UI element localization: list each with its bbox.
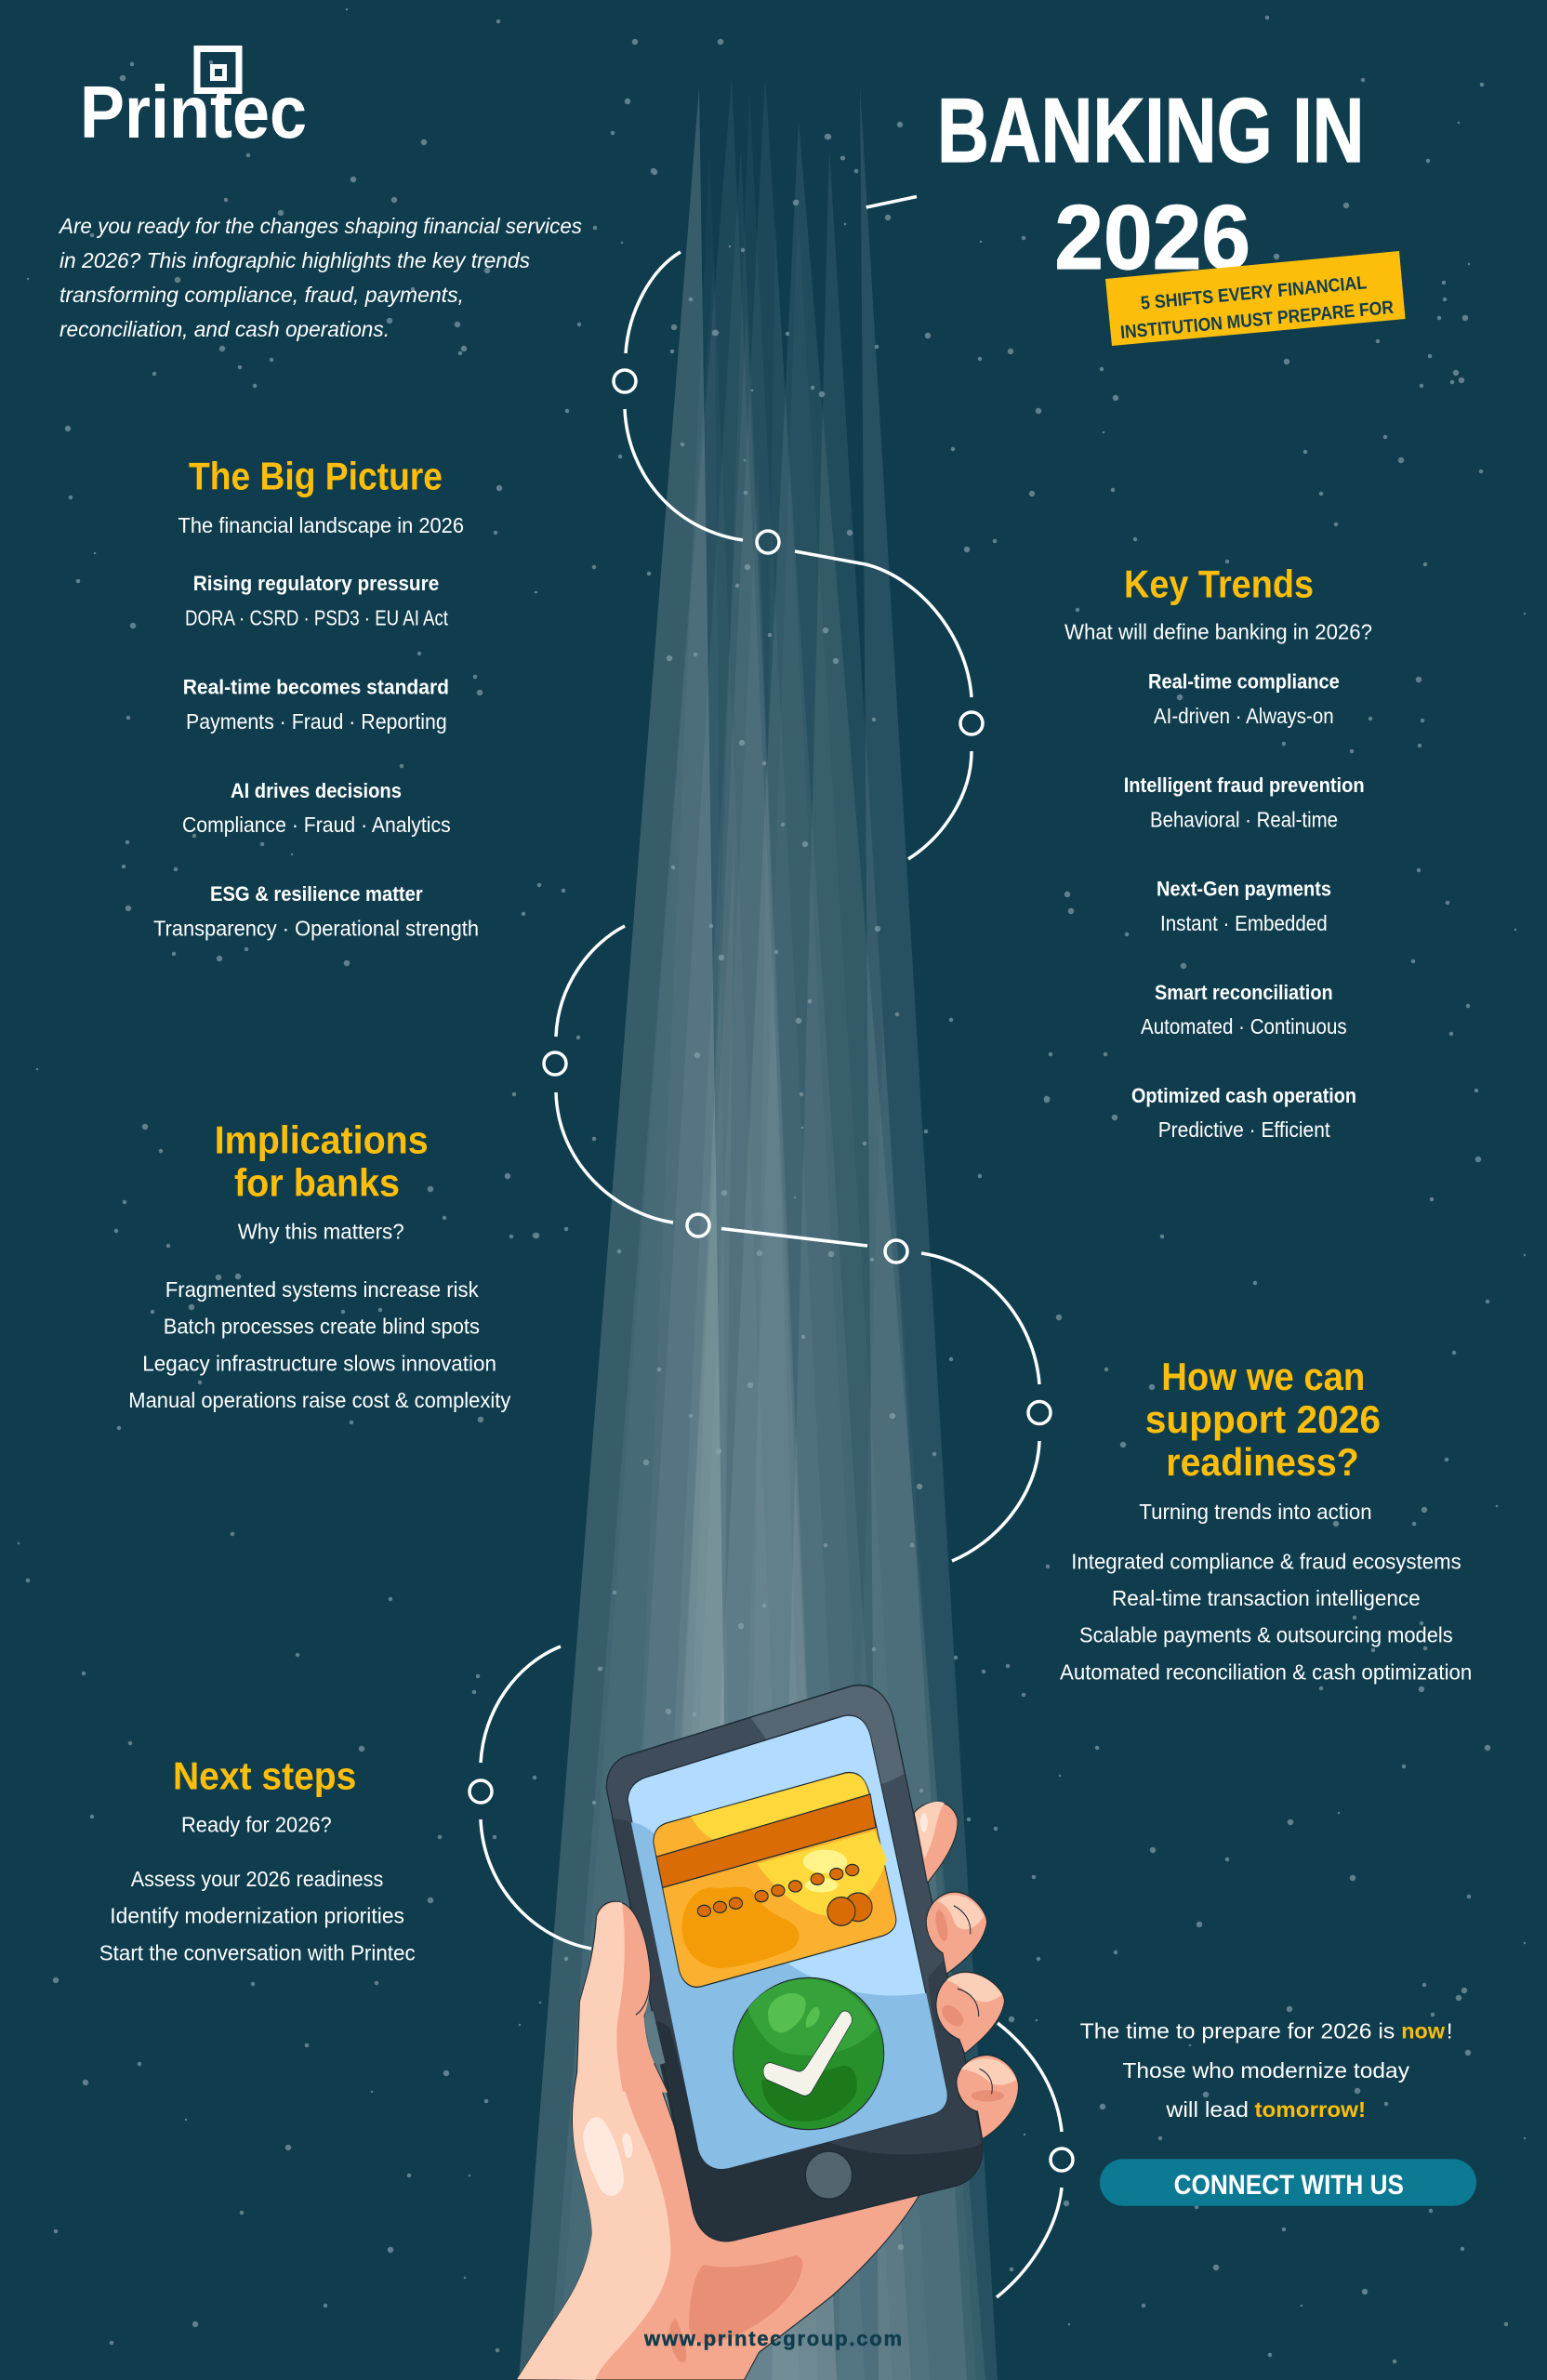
heading: implications for banks: for banks bbox=[234, 1161, 400, 1205]
credit card bbox=[654, 1772, 896, 1987]
closing message: tomorrow! bbox=[1255, 2097, 1366, 2122]
list: implications: Fragmented systems increase risk bbox=[165, 1277, 479, 1302]
closing message: Those who modernize today bbox=[1122, 2058, 1410, 2082]
title bbox=[937, 79, 1365, 288]
subheading: financial landscape: The financial landscape in 2026 bbox=[178, 513, 464, 537]
list: support offerings: Scalable payments & outsourcing models bbox=[1079, 1623, 1453, 1647]
subtitle banner bbox=[1105, 251, 1406, 346]
heading: implications for banks bbox=[215, 1118, 429, 1205]
heading: key trends: Key Trends bbox=[1124, 562, 1314, 606]
heading: how we can support 2026 readiness bbox=[1145, 1355, 1381, 1484]
illustration: hand holding phone bbox=[516, 1686, 1018, 2380]
home button bbox=[806, 2151, 852, 2199]
item: intelligent fraud prevention: Intelligent fraud prevention bbox=[1124, 774, 1365, 797]
list: next steps: Assess your 2026 readiness bbox=[131, 1867, 383, 1891]
list: implications: Manual operations raise cost & complexity bbox=[128, 1388, 511, 1412]
item: esg and resilience: Transparency · Operational strength bbox=[153, 917, 479, 941]
title: 2026 bbox=[1054, 186, 1250, 288]
closing message: will lead bbox=[1165, 2097, 1249, 2122]
item: real-time compliance: AI-driven · Always-on bbox=[1154, 704, 1334, 728]
fingers bbox=[914, 1802, 1018, 2139]
list: next steps: Start the conversation with Printec bbox=[99, 1940, 416, 1964]
list: implications bbox=[128, 1277, 511, 1412]
panel: implications for banks bbox=[128, 1118, 511, 1412]
item: esg and resilience bbox=[153, 882, 479, 941]
item: real-time compliance: Real-time compliance bbox=[1148, 670, 1340, 694]
heading: next steps: Next steps bbox=[173, 1753, 356, 1797]
item: smart reconciliation: Automated · Continuous bbox=[1141, 1014, 1347, 1038]
item: rising regulatory pressure: Rising regulatory pressure bbox=[193, 572, 439, 595]
item: real-time becomes standard: Real-time becomes standard bbox=[183, 676, 449, 699]
item: real-time becomes standard: Payments · Fraud · Reporting bbox=[186, 709, 447, 734]
intro text bbox=[58, 214, 582, 341]
item: ai drives decisions: AI drives decisions bbox=[231, 779, 402, 802]
list: support offerings: Automated reconciliation & cash optimization bbox=[1060, 1659, 1472, 1684]
item: intelligent fraud prevention bbox=[1124, 774, 1365, 832]
title: BANKING IN bbox=[937, 79, 1365, 181]
closing message bbox=[1080, 2019, 1452, 2122]
light beams bbox=[519, 74, 998, 2380]
subtitle banner: 5 SHIFTS EVERY FINANCIAL bbox=[1140, 272, 1368, 314]
thumb bbox=[616, 1903, 668, 2093]
subheading: what will define banking: What will define banking in 2026? bbox=[1064, 620, 1372, 644]
panel: next steps bbox=[99, 1753, 416, 1964]
intro text: in 2026? This infographic highlights the key trends bbox=[60, 248, 530, 272]
item: ai drives decisions bbox=[182, 779, 451, 837]
closing message: now bbox=[1401, 2019, 1445, 2043]
phone body bbox=[606, 1686, 983, 2241]
subheading: ready for 2026: Ready for 2026? bbox=[181, 1813, 332, 1837]
item: optimized cash operation bbox=[1131, 1084, 1356, 1142]
closing message: The time to prepare for 2026 is bbox=[1080, 2019, 1395, 2043]
item: real-time compliance bbox=[1148, 670, 1340, 728]
heading: how we can support 2026 readiness: How we can bbox=[1161, 1355, 1365, 1398]
item: rising regulatory pressure bbox=[185, 572, 448, 630]
intro text: transforming compliance, fraud, payments, bbox=[60, 283, 464, 307]
item: esg and resilience: ESG & resilience matter bbox=[210, 882, 423, 906]
list: implications: Batch processes create blind spots bbox=[164, 1315, 480, 1339]
palm and wrist bbox=[516, 1901, 919, 2380]
list: implications: Legacy infrastructure slows innovation bbox=[142, 1351, 496, 1375]
heading: how we can support 2026 readiness: readiness? bbox=[1166, 1440, 1359, 1484]
item: smart reconciliation: Smart reconciliation bbox=[1155, 981, 1333, 1004]
subtitle banner: INSTITUTION MUST PREPARE FOR bbox=[1119, 298, 1395, 343]
item: next-gen payments: Next-Gen payments bbox=[1157, 878, 1331, 901]
website url: www.printecgroup.com bbox=[643, 2327, 902, 2350]
intro text: Are you ready for the changes shaping financial services bbox=[58, 214, 582, 238]
list: next steps: Identify modernization priorities bbox=[110, 1903, 404, 1927]
panel: how we can support bbox=[1060, 1355, 1472, 1684]
item: optimized cash operation: Predictive · Efficient bbox=[1158, 1117, 1330, 1142]
item: next-gen payments: Instant · Embedded bbox=[1160, 911, 1328, 935]
subheading: why this matters: Why this matters? bbox=[238, 1220, 404, 1244]
list: support offerings: Real-time transaction intelligence bbox=[1112, 1586, 1421, 1610]
item: optimized cash operation: Optimized cash operation bbox=[1131, 1084, 1356, 1107]
item: ai drives decisions: Compliance · Fraud · Analytics bbox=[182, 813, 451, 837]
panel: key trends bbox=[1064, 562, 1372, 1142]
item: rising regulatory pressure: DORA · CSRD · PSD3 · EU AI Act bbox=[185, 606, 448, 630]
connector path bbox=[469, 197, 1073, 2297]
phone screen bbox=[628, 1715, 947, 2169]
heading: how we can support 2026 readiness: support 2026 bbox=[1145, 1397, 1381, 1441]
list: support offerings bbox=[1060, 1549, 1472, 1684]
item: real-time becomes standard bbox=[183, 676, 449, 734]
connect button bbox=[1100, 2159, 1476, 2206]
item: next-gen payments bbox=[1157, 878, 1331, 935]
connect button: CONNECT WITH US bbox=[1174, 2170, 1404, 2201]
heading: implications for banks: Implications bbox=[215, 1118, 429, 1162]
closing message: ! bbox=[1447, 2019, 1452, 2043]
list: support offerings: Integrated compliance & fraud ecosystems bbox=[1071, 1549, 1461, 1573]
item: smart reconciliation bbox=[1141, 981, 1347, 1038]
panel: the big picture bbox=[153, 454, 479, 941]
green check badge bbox=[734, 1977, 884, 2130]
list: next steps bbox=[99, 1867, 416, 1964]
logo: Printec: Printec bbox=[80, 71, 307, 153]
subheading: turning trends into action: Turning trends into action bbox=[1139, 1500, 1372, 1524]
heading: the big picture: The Big Picture bbox=[189, 454, 443, 498]
item: intelligent fraud prevention: Behavioral · Real-time bbox=[1150, 808, 1338, 832]
intro text: reconciliation, and cash operations. bbox=[60, 317, 390, 341]
